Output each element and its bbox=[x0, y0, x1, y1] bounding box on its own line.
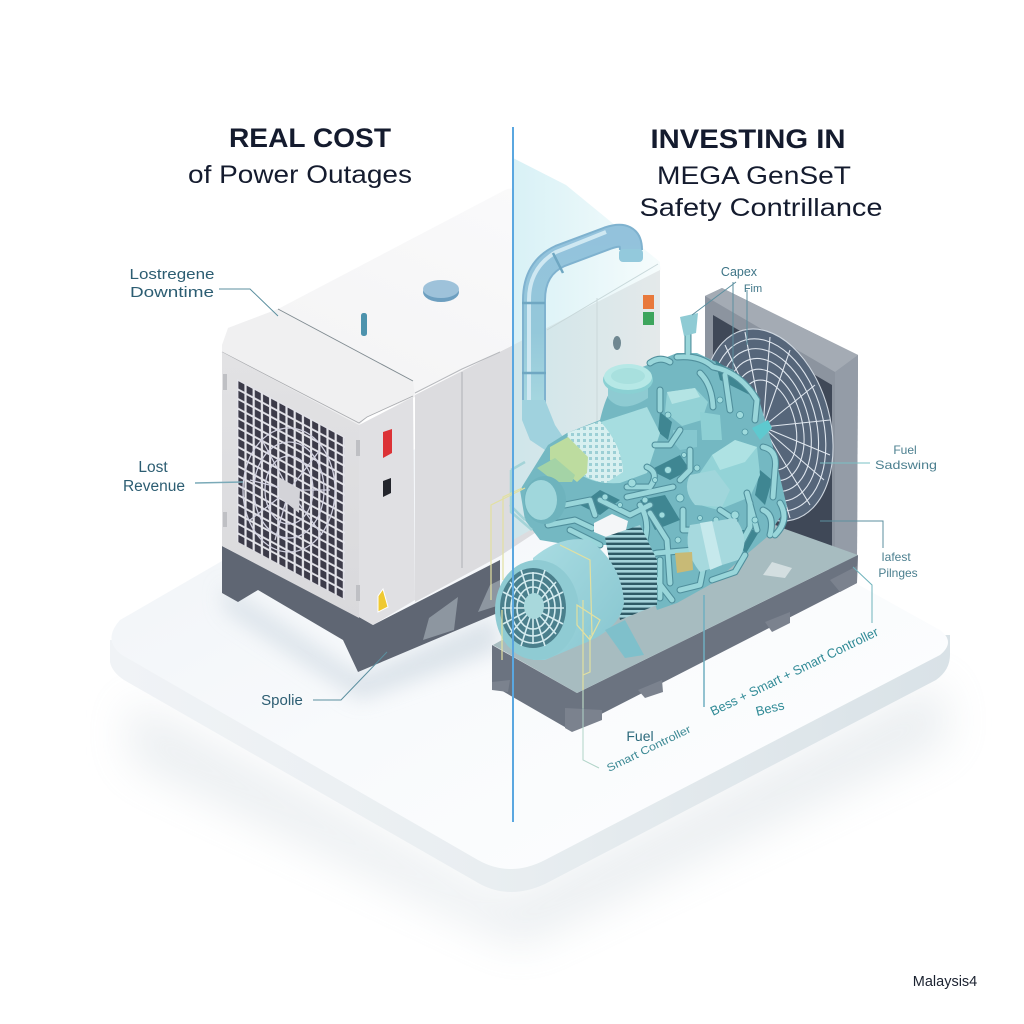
footer mark: Malaysis4 bbox=[913, 974, 977, 990]
port bbox=[613, 336, 621, 350]
label: capex bbox=[721, 265, 762, 295]
title: investing bbox=[640, 124, 882, 222]
panel: machinery skid bbox=[492, 520, 858, 732]
lower alternator unit bbox=[675, 518, 744, 573]
warning sticker bbox=[378, 589, 388, 612]
skid top bbox=[493, 520, 858, 693]
label: safety: Pilnges bbox=[878, 566, 918, 580]
panel: closed genset enclosure bbox=[222, 188, 660, 700]
shadow under enclosure bbox=[222, 585, 500, 700]
cooling ribs bbox=[605, 525, 657, 620]
label: bess: Bess bbox=[754, 697, 786, 719]
label: lost revenue bbox=[123, 459, 185, 495]
label: safety: Iafest bbox=[881, 550, 911, 564]
label: capex: Fim bbox=[744, 283, 762, 295]
white module bbox=[594, 514, 628, 537]
panel: isometric platform bbox=[110, 397, 950, 892]
roof bbox=[228, 188, 660, 395]
skid feet bbox=[492, 566, 857, 732]
divider bbox=[512, 127, 514, 822]
corner side panel bbox=[359, 397, 415, 625]
air filter bbox=[603, 364, 653, 406]
engine pipes bbox=[548, 334, 784, 600]
vent grille with fan bbox=[237, 379, 345, 600]
mounting plate bbox=[763, 562, 792, 578]
label: fuel: Fuel bbox=[626, 728, 654, 744]
leader lines bbox=[195, 282, 883, 768]
main cylinder bbox=[567, 407, 660, 483]
roof seam bbox=[278, 309, 413, 381]
front flange bbox=[524, 476, 566, 524]
panel: ghost tint over enclosure bbox=[513, 158, 660, 540]
ribbed air cooler bbox=[567, 421, 623, 483]
red label bbox=[383, 429, 392, 458]
title: investing: INVESTING IN bbox=[650, 124, 846, 154]
green block bbox=[550, 437, 588, 482]
generator body bbox=[533, 539, 624, 660]
label: spoilage: Spolie bbox=[261, 692, 303, 709]
label: lost revenue downtime: Downtime bbox=[130, 284, 214, 301]
label: bess smart controller: Bess + Smart + Smart Controller bbox=[708, 624, 881, 719]
green indicator bbox=[643, 312, 654, 325]
title: real cost bbox=[188, 123, 412, 189]
panel: engine assembly bbox=[510, 313, 787, 610]
label: lost revenue: Lost bbox=[138, 459, 168, 476]
title: real cost: of Power Outages bbox=[188, 161, 412, 189]
title: investing: Safety Contrillance bbox=[640, 194, 882, 222]
orange indicator bbox=[643, 295, 654, 309]
radiator inner panel bbox=[713, 315, 832, 556]
small bolts bbox=[602, 397, 758, 543]
title: investing: MEGA GenSeT bbox=[657, 162, 851, 190]
label: fuel savings: Fuel bbox=[893, 443, 917, 457]
roof pin bbox=[361, 313, 367, 336]
engine silhouette bbox=[520, 353, 787, 610]
label: lost revenue: Revenue bbox=[123, 478, 185, 495]
valve cover blocks bbox=[673, 412, 760, 510]
label: lost revenue downtime bbox=[130, 266, 214, 301]
switch bbox=[383, 478, 391, 497]
door face bbox=[222, 352, 359, 618]
fan guard bbox=[683, 314, 853, 536]
drum foot bbox=[605, 620, 644, 658]
dark gaps bbox=[580, 360, 772, 555]
label: fuel savings bbox=[875, 443, 937, 472]
chamfer bbox=[222, 309, 415, 425]
teal accent bbox=[752, 420, 772, 440]
yellow wire frames bbox=[491, 488, 600, 708]
hinges bbox=[223, 374, 360, 601]
label: lost revenue downtime: Lostregene bbox=[130, 266, 214, 283]
radiator frame bbox=[705, 288, 858, 572]
turbo housing bbox=[665, 388, 708, 426]
platform shadow bbox=[130, 680, 950, 945]
long side bbox=[415, 270, 660, 602]
label: safety bbox=[878, 550, 918, 580]
panel: generator drum bbox=[495, 525, 657, 660]
panel: exhaust pipe bbox=[522, 232, 643, 452]
drum face bbox=[495, 560, 579, 660]
enclosure base bbox=[222, 546, 500, 672]
flange supports bbox=[510, 462, 532, 530]
label: capex: Capex bbox=[721, 265, 758, 279]
roof cap bbox=[423, 280, 459, 302]
label: smart controller: Smart Controller bbox=[605, 723, 693, 775]
skid side bbox=[492, 555, 858, 730]
base vent bbox=[423, 597, 458, 640]
title: real cost: REAL COST bbox=[229, 123, 392, 153]
panel: radiator with fan bbox=[683, 288, 858, 572]
label: fuel savings: Sadswing bbox=[875, 458, 937, 472]
long side seams bbox=[461, 372, 463, 568]
cap on stem bbox=[680, 313, 698, 336]
